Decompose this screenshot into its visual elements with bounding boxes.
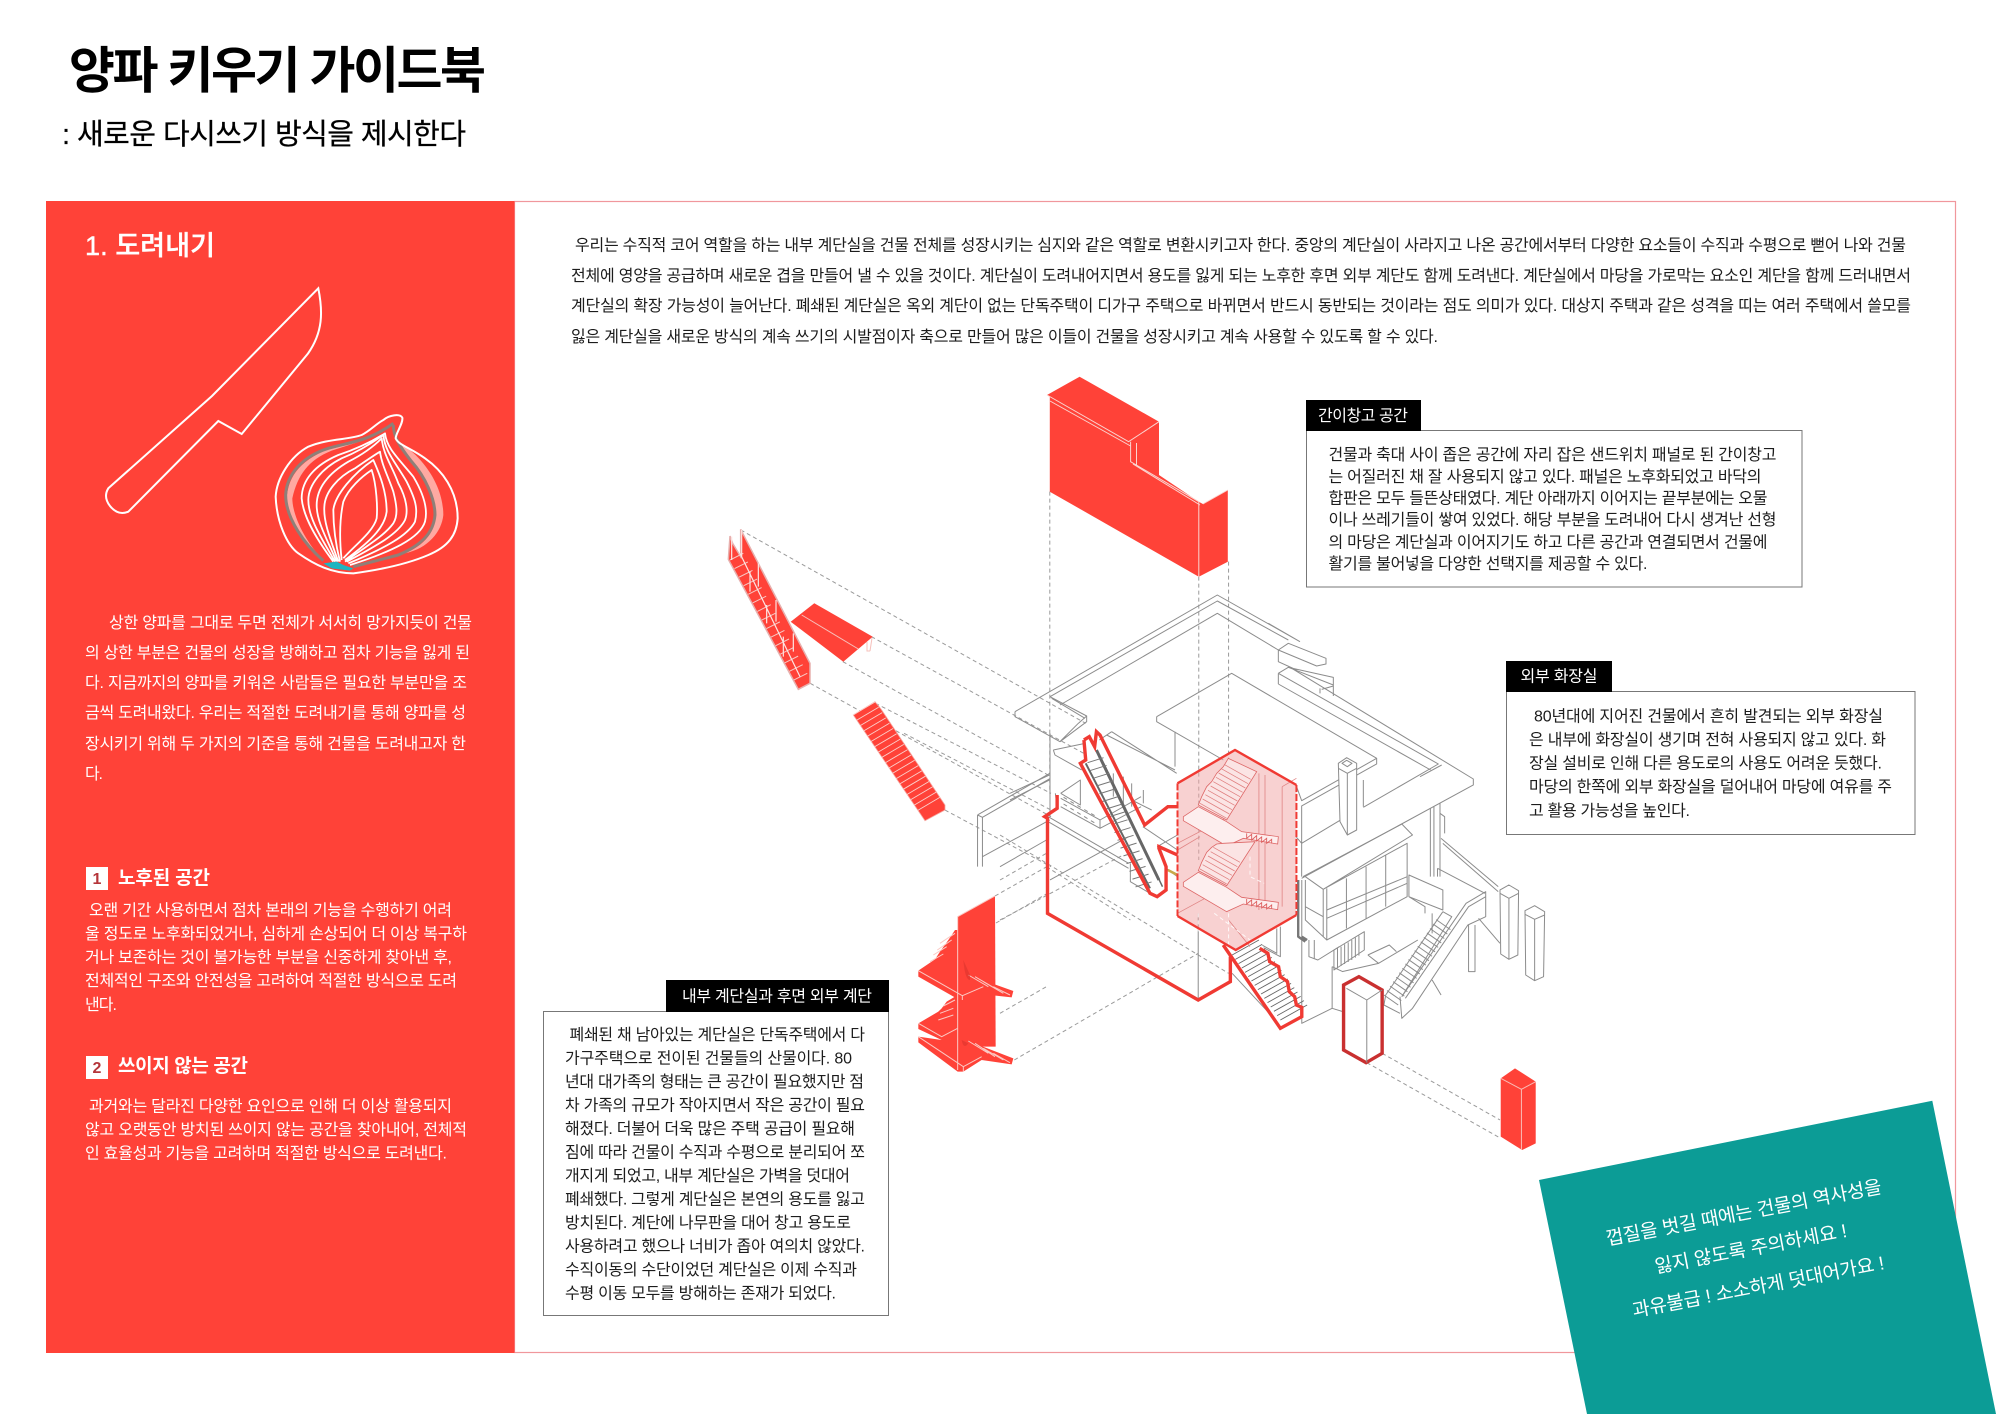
left eave block	[1015, 697, 1087, 742]
balcony and upper openings	[1055, 780, 1141, 828]
note text	[1604, 1176, 1886, 1322]
item 1: heading: 노후된 공간	[118, 867, 210, 889]
red stair with railings	[728, 529, 810, 689]
callout text: 장실 설비로 인해 다른 용도로의 사용도 어려운 듯했다.	[1529, 754, 1882, 772]
callout tab	[1506, 661, 1612, 692]
callout: teal rotated note	[1539, 1101, 1996, 1414]
outline: lower outer stair cut	[1223, 940, 1307, 1028]
item 1: text: 낸다.	[85, 996, 117, 1014]
red outlines on building	[1045, 732, 1536, 1150]
icon: knife	[106, 288, 321, 513]
callout text: 폐쇄했다. 그렇게 계단실은 본연의 용도를 잃고	[565, 1190, 865, 1208]
right eaves	[1278, 669, 1473, 878]
callout text: 마당의 한쪽에 외부 화장실을 덜어내어 마당에 여유를 주	[1529, 778, 1892, 796]
icon: onion	[276, 415, 458, 573]
note text: 과유불급 ! 소소하게 덧대어가요 !	[1631, 1252, 1886, 1322]
callout text: 가구주택으로 전이된 건물들의 산물이다. 80	[565, 1050, 852, 1068]
low roof and side walls	[1010, 732, 1177, 817]
exploded isometric drawing	[728, 377, 1545, 1150]
bay window	[1303, 824, 1412, 960]
callout text: 방치된다. 계단에 나무판을 대어 창고 용도로	[565, 1214, 851, 1232]
pink stairwell block	[1177, 750, 1296, 950]
item 2: number badge: 2	[93, 1060, 102, 1077]
callout tab: 외부 화장실	[1520, 668, 1598, 686]
item 2: text: 과거와는 달라진 다양한 요인으로 인해 더 이상 활용되지	[89, 1098, 452, 1116]
text block: intro paragraph	[571, 236, 1911, 346]
callout tab: 내부 계단실과 후면 외부 계단	[682, 988, 872, 1006]
callout text: 의 마당은 계단실과 이어지기도 하고 다른 공간과 연결되면서 건물에	[1328, 534, 1768, 552]
red interior stairwell removed	[918, 896, 1013, 1072]
item 2: heading: 쓰이지 않는 공간	[118, 1055, 248, 1077]
chimney	[1338, 758, 1357, 835]
left low wall piece	[978, 773, 1050, 867]
callout text	[565, 1026, 865, 1302]
red roof plate	[791, 603, 873, 662]
callout text: 해졌다. 더불어 더욱 많은 주택 공급이 필요해	[565, 1120, 855, 1138]
note text: 껍질을 벗길 때에는 건물의 역사성을	[1604, 1176, 1883, 1250]
item 1: text: 오랜 기간 사용하면서 점차 본래의 기능을 수행하기 어려	[89, 902, 452, 920]
intro text: 금씩 도려내왔다. 우리는 적절한 도려내기를 통해 양파를 성	[85, 704, 466, 722]
callout text: 은 내부에 화장실이 생기며 전혀 사용되지 않고 있다. 화	[1529, 731, 1886, 749]
dashed projection lines	[741, 492, 1501, 1138]
intro text: 다.	[85, 765, 103, 783]
subtitle: : 새로운 다시쓰기 방식을 제시한다	[62, 119, 466, 151]
stairs inside pink block	[1183, 758, 1278, 912]
content frame	[514, 202, 1956, 1352]
building: roof and upper volumes	[1010, 595, 1473, 878]
outline: upper stair cut	[1080, 732, 1177, 897]
callout: interior and rear stairs	[544, 980, 889, 1316]
callout text: 고 활용 가능성을 높인다.	[1529, 802, 1690, 820]
callout: outdoor toilet	[1506, 661, 1915, 834]
red block: toilet removed	[1501, 1068, 1536, 1150]
callout text: 수평 이동 모두를 방해하는 존재가 되었다.	[565, 1284, 836, 1302]
text block: intro paragraph: 전체에 영양을 공급하며 새로운 겹을 만들어 낼 수 있을 것이다. 계단실이 도려내어지면서 용도를 잃게 되는 노후한 후면 외부 계단도 함께 도려낸다. 계단실에서 마당을 가로막는 요소인 계단을 함께 드러내면서	[571, 267, 1911, 285]
callout text: 개지게 되었고, 내부 계단실은 가벽을 덧대어	[565, 1167, 850, 1185]
callout text	[1328, 446, 1776, 573]
item 2: number badge	[86, 1056, 108, 1079]
roof outline	[1015, 595, 1300, 712]
intro text: 상한 양파를 그대로 두면 전체가 서서히 망가지듯이 건물	[109, 614, 472, 632]
callout tab	[1306, 400, 1421, 431]
item 1: number badge	[86, 867, 108, 890]
building line drawing: lower floors	[1000, 780, 1545, 1023]
entrance hatch	[1332, 932, 1418, 972]
note text: 잃지 않도록 주의하세요 !	[1653, 1220, 1849, 1278]
gate pillars	[1500, 885, 1519, 959]
upper volume	[1157, 673, 1377, 877]
section heading: 1. 도려내기	[85, 231, 215, 261]
intro text: 장시키기 위해 두 가지의 기준을 통해 건물을 도려내고자 한	[85, 735, 466, 753]
item 2: text	[85, 1098, 467, 1162]
callout text: 활기를 불어넣을 다양한 선택지를 제공할 수 있다.	[1328, 555, 1648, 573]
outline: outdoor toilet	[1344, 977, 1382, 1063]
text block: intro paragraph: 우리는 수직적 코어 역할을 하는 내부 계단실을 건물 전체를 성장시키는 심지와 같은 역할로 변환시키고자 한다. 중앙의 계단실이 사라지고 나온 공간에서부터 다양한 요소들이 수직과 수평으로 뻗어 나와 건물	[575, 236, 1906, 254]
callout: storage space	[1306, 400, 1802, 587]
item 1: text: 전체적인 구조와 안전성을 고려하여 적절한 방식으로 도려	[85, 972, 457, 990]
item 2: text: 않고 오랫동안 방치된 쓰이지 않는 공간을 찾아내어, 전체적	[85, 1121, 467, 1139]
callout text: 사용하려고 했으나 너비가 좁아 여의치 않았다.	[565, 1238, 865, 1256]
callout text	[1529, 708, 1892, 820]
panel: red sidebar	[46, 201, 514, 1353]
outline: rear wall cut	[1045, 795, 1230, 1000]
callout text: 짐에 따라 건물이 수직과 수평으로 분리되어 쪼	[565, 1144, 865, 1162]
title: 양파 키우기 가이드북	[69, 43, 486, 99]
intro text	[85, 614, 472, 783]
callout text: 80년대에 지어진 건물에서 흔히 발견되는 외부 화장실	[1534, 708, 1883, 726]
rear stairs	[1409, 875, 1443, 933]
intro text: 의 상한 부분은 건물의 성장을 방해하고 점차 기능을 잃게 된	[85, 644, 470, 662]
item 1: text: 거나 보존하는 것이 불가능한 부분을 신중하게 찾아낸 후,	[85, 948, 452, 966]
red straight stair	[853, 702, 945, 821]
callout text: 합판은 모두 들뜬상태였다. 계단 아래까지 이어지는 끝부분에는 오물	[1328, 490, 1768, 508]
text block: intro paragraph: 계단실의 확장 가능성이 늘어난다. 폐쇄된 계단실은 옥외 계단이 없는 단독주택이 디가구 주택으로 바뀌면서 반드시 동반되는 것이라는 점도 의미가 있다. 대상지 주택과 같은 성격을 띠는 여러 주택에서 쓸모를	[571, 297, 1911, 315]
intro text: 다. 지금까지의 양파를 키워온 사람들은 필요한 부분만을 조	[85, 674, 467, 692]
callout text: 차 가족의 규모가 작아지면서 작은 공간이 필요	[565, 1096, 865, 1114]
callout tab	[666, 980, 889, 1012]
red block: storage wall	[1047, 377, 1228, 577]
callout text: 수직이동의 수단이었던 계단실은 이제 수직과	[565, 1261, 857, 1279]
callout text: 이나 쓰레기들이 쌓여 있었다. 해당 부분을 도려내어 다시 생겨난 선형	[1328, 511, 1776, 529]
callout text: 폐쇄된 채 남아있는 계단실은 단독주택에서 다	[570, 1026, 865, 1044]
callout text: 건물과 축대 사이 좁은 공간에 자리 잡은 샌드위치 패널로 된 간이창고	[1328, 446, 1776, 464]
item 1: number badge: 1	[93, 871, 102, 888]
callout tab: 간이창고 공간	[1318, 407, 1408, 425]
item 1: text: 울 정도로 노후화되었거나, 심하게 손상되어 더 이상 복구하	[85, 925, 467, 943]
callout text: 년대 대가족의 형태는 큰 공간이 필요했지만 점	[565, 1073, 864, 1091]
text block: intro paragraph: 잃은 계단실을 새로운 방식의 계속 쓰기의 시발점이자 축으로 만들어 많은 이들이 건물을 성장시키고 계속 사용할 수 있도록 할 수 있다.	[571, 328, 1438, 346]
rear dormers	[1278, 643, 1333, 696]
callout text: 는 어질러진 채 잘 사용되지 않고 있다. 패널은 노후화되었고 바닥의	[1328, 468, 1762, 486]
item 1: text	[85, 902, 467, 1014]
item 2: text: 인 효율성과 기능을 고려하며 적절한 방식으로 도려낸다.	[85, 1144, 447, 1162]
